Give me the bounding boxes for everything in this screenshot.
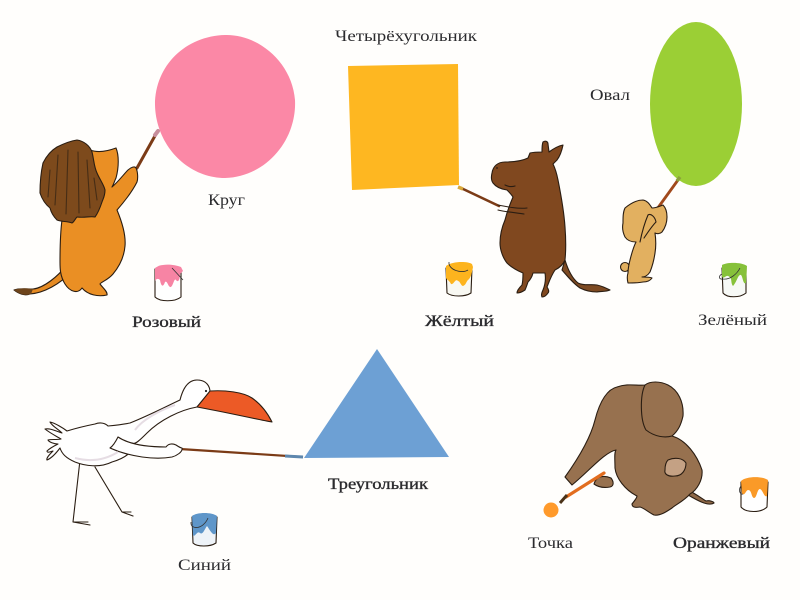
- moose tail: [562, 260, 610, 292]
- lion tail: [14, 266, 71, 295]
- dog brush: [652, 180, 678, 216]
- stork legs: [73, 460, 133, 525]
- dog painting: [620, 177, 680, 283]
- moose brush: [461, 188, 499, 206]
- pink paint can: [155, 265, 183, 301]
- dog arm: [640, 214, 656, 242]
- orange paint can: [740, 477, 768, 512]
- stork beak: [197, 391, 272, 422]
- green oval: [650, 22, 742, 186]
- moose painting: [458, 141, 610, 297]
- stork body: [45, 380, 210, 466]
- label: Оранжевый: Оранжевый: [673, 535, 771, 552]
- elephant foot pad: [665, 458, 686, 476]
- label: Розовый: Розовый: [132, 314, 202, 331]
- label: Синий: Синий: [178, 557, 232, 574]
- pink circle: [155, 35, 295, 178]
- blue triangle: [304, 349, 449, 458]
- dog body: [623, 200, 667, 283]
- elephant body: [565, 382, 702, 515]
- elephant brush: [566, 473, 604, 497]
- elephant tail: [686, 490, 714, 504]
- label: Овал: Овал: [590, 87, 630, 104]
- moose arm: [498, 205, 527, 214]
- yellow paint can: [446, 262, 473, 296]
- stork arms: [110, 437, 182, 458]
- green paint can: [719, 263, 747, 297]
- label: Круг: Круг: [208, 192, 245, 209]
- lion brush: [137, 134, 156, 168]
- lion mane: [40, 140, 105, 223]
- label: Жёлтый: Жёлтый: [425, 313, 495, 330]
- label: Четырёхугольник: Четырёхугольник: [335, 28, 477, 45]
- lion painting: [14, 131, 158, 296]
- label: Треугольник: Треугольник: [328, 476, 428, 493]
- label: Точка: Точка: [528, 535, 573, 552]
- stork brush: [180, 449, 303, 457]
- lion body: [60, 148, 138, 296]
- stork belly shading: [75, 405, 175, 460]
- elephant front foot: [594, 476, 613, 487]
- moose body: [491, 141, 566, 297]
- label: Зелёный: Зелёный: [698, 312, 768, 329]
- stork painting: [45, 380, 303, 525]
- elephant painting: [560, 382, 714, 515]
- dog tail: [620, 262, 630, 272]
- orange dot: [544, 502, 558, 518]
- blue paint can: [191, 513, 217, 546]
- yellow square: [348, 64, 459, 190]
- elephant ear line: [641, 385, 672, 437]
